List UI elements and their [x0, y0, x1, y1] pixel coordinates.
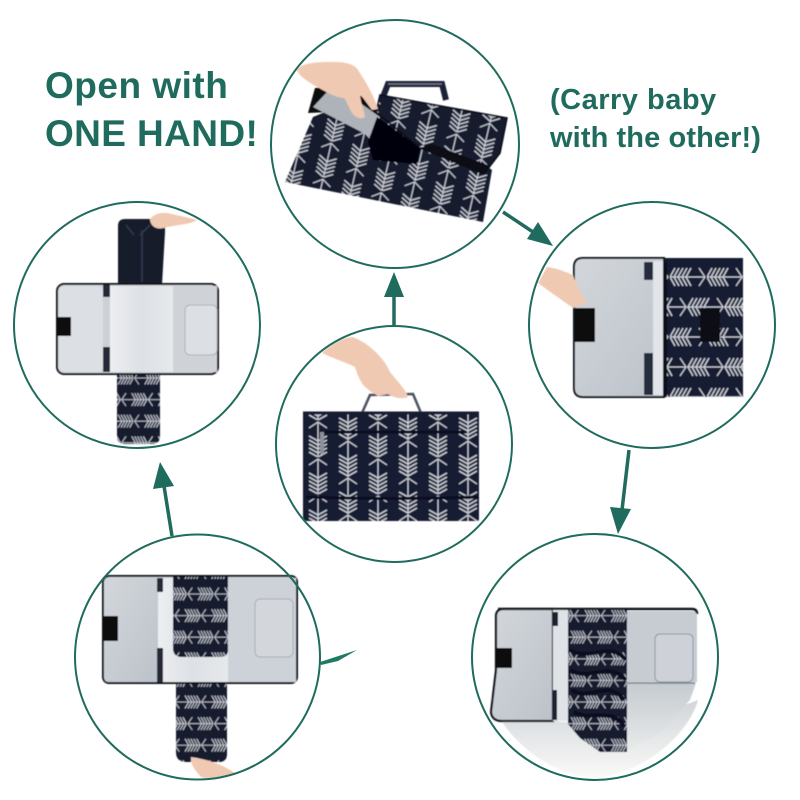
panel: step 2 lifting the flap	[271, 20, 519, 268]
velcro tab	[495, 648, 512, 668]
icon: hand holding handle	[322, 337, 408, 398]
velcro tab	[103, 616, 118, 641]
bottom navy flap	[117, 373, 160, 444]
crumpled navy flap	[568, 610, 627, 752]
black flap edge	[308, 86, 382, 128]
right silver panel with pocket	[627, 611, 697, 682]
silver inner panel	[574, 258, 664, 397]
top navy flap	[118, 219, 165, 285]
floor and lower reflections	[490, 698, 698, 778]
bag base	[285, 110, 492, 222]
title: open with one hand: ONE HAND!	[45, 113, 258, 154]
subtitle: carry baby with the other: with the other!)	[549, 122, 761, 154]
title: open with one hand: Open with	[45, 65, 228, 106]
grey inner panel	[313, 92, 380, 138]
velcro tab	[575, 308, 595, 342]
panel: step 1 carrying bag by handle	[276, 326, 512, 562]
velcro tab	[700, 308, 720, 342]
navy flap overlay	[173, 577, 228, 657]
title: open with one hand	[45, 65, 258, 154]
pocket	[255, 599, 293, 657]
reflection on lower panel	[627, 683, 696, 750]
panel: step 6 fully open changing mat	[14, 202, 260, 448]
silver left panel	[59, 286, 103, 372]
centre white panel	[110, 286, 173, 372]
icon: bag handle	[383, 84, 446, 100]
lower navy flap	[176, 683, 227, 762]
silver left panel	[491, 609, 553, 721]
front flap	[376, 95, 507, 174]
subtitle: carry baby with the other: (Carry baby	[550, 84, 717, 116]
subtitle: carry baby with the other	[549, 84, 761, 154]
arrow: bottom left to left	[153, 462, 174, 536]
icon: hand on flap	[538, 267, 587, 308]
fold seam	[306, 497, 479, 498]
mat body	[103, 576, 297, 683]
silver left panel	[104, 578, 158, 682]
panel: step 5 lower flap folded	[75, 534, 357, 780]
mat top strip	[498, 609, 697, 614]
zipper	[320, 430, 466, 434]
icon: bag handle	[362, 394, 421, 413]
icon: hand pulling flap	[191, 757, 236, 778]
icon: hand opening flap	[297, 62, 378, 118]
panel: step 3 flap opened to side	[529, 202, 775, 448]
mat body	[57, 284, 218, 374]
pocket	[185, 305, 217, 355]
arrow: top to right	[503, 212, 553, 246]
bag body	[303, 413, 479, 521]
icon: hand holding top flap	[150, 213, 197, 229]
decorative tail near circle	[320, 650, 357, 665]
black flap underside	[368, 117, 420, 164]
arrow: right to bottom right	[610, 450, 631, 534]
panel: step 4 flap unfolding	[472, 534, 718, 780]
arrow: centre to top	[384, 272, 404, 325]
velcro tab	[57, 317, 71, 336]
navy exterior panel	[664, 258, 743, 397]
